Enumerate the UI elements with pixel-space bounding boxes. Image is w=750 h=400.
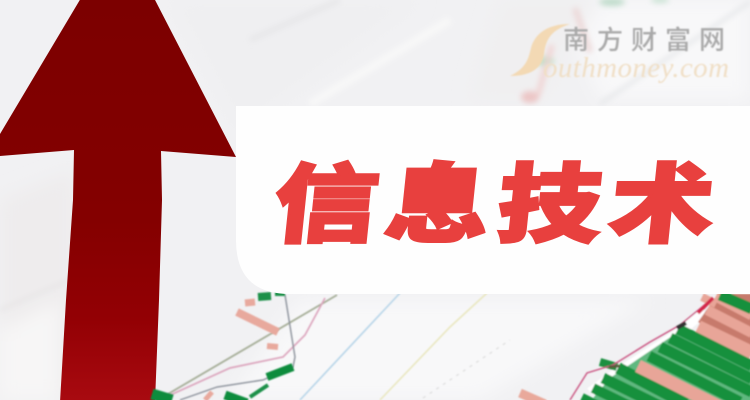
green candles [720, 295, 750, 309]
title text: 信息技术 [268, 135, 729, 260]
logo: Southmoney [510, 20, 733, 84]
trend lines [570, 298, 713, 400]
icon: logo swoosh [510, 24, 570, 76]
candlestick chart: right [520, 294, 750, 400]
white gap band [590, 312, 705, 392]
moving average lines [166, 293, 510, 400]
blurred chart fragments behind logo [521, 0, 669, 103]
candlestick chart: left [152, 293, 510, 400]
pink candles top [702, 297, 716, 304]
logo chinese name: 南方财富网 [563, 20, 733, 57]
icon: red up arrow [0, 0, 236, 400]
logo domain: outhmoney.com [543, 52, 729, 84]
separator underlay [590, 332, 750, 400]
candles [152, 293, 293, 400]
